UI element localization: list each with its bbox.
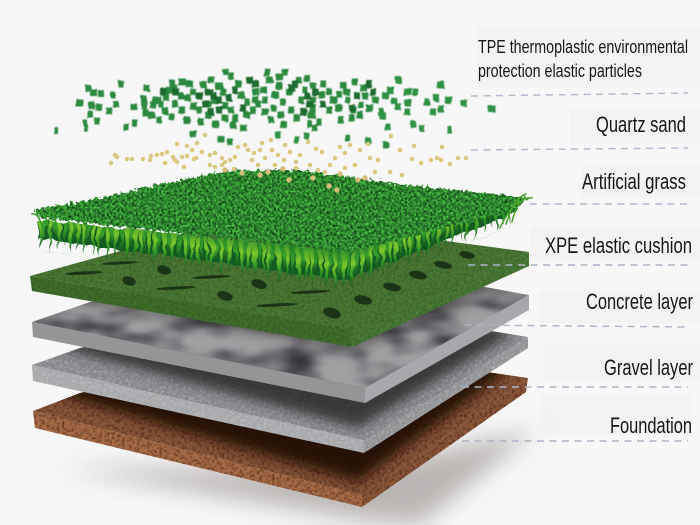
layer: XPE cushion — [30, 215, 529, 347]
cushion slits — [65, 261, 330, 308]
grass corner tufts — [32, 194, 532, 238]
gravel left side — [32, 365, 364, 453]
cushion holes — [121, 250, 476, 321]
leader line: artificial grass — [530, 203, 688, 205]
cushion top — [30, 215, 529, 330]
label: TPE particles: protection elastic particles — [478, 61, 642, 81]
cushion right side — [352, 252, 529, 347]
ground shadow — [60, 430, 535, 525]
leader line: TPE particles — [471, 93, 688, 96]
leader line: foundation — [462, 440, 688, 442]
layer: gravel — [32, 328, 528, 453]
leader line: XPE cushion — [468, 264, 688, 266]
concrete right side — [365, 295, 529, 403]
gravel top — [32, 300, 528, 440]
layer: foundation — [33, 370, 528, 507]
foundation top — [33, 345, 528, 495]
layer: concrete — [32, 282, 529, 403]
foundation shadow from gravel — [56, 370, 514, 489]
leader line: quartz sand — [471, 148, 688, 150]
leader line: concrete — [465, 325, 688, 327]
artificial grass — [32, 170, 532, 293]
TPE particles — [54, 72, 495, 145]
concrete shadow from cushion — [74, 282, 509, 356]
gravel shadow from concrete — [59, 328, 517, 436]
grass front right blades — [350, 181, 518, 290]
foundation right side — [362, 378, 528, 507]
quartz sand — [111, 135, 466, 190]
foundation left side — [33, 411, 362, 507]
concrete left side — [32, 322, 365, 403]
concrete top — [32, 250, 529, 388]
cushion left side — [30, 276, 352, 347]
label backdrop panels — [477, 28, 700, 434]
leader line: gravel — [462, 386, 688, 388]
grass front left blades — [38, 181, 518, 293]
gravel right side — [364, 337, 528, 453]
grass turf surface — [34, 170, 528, 252]
